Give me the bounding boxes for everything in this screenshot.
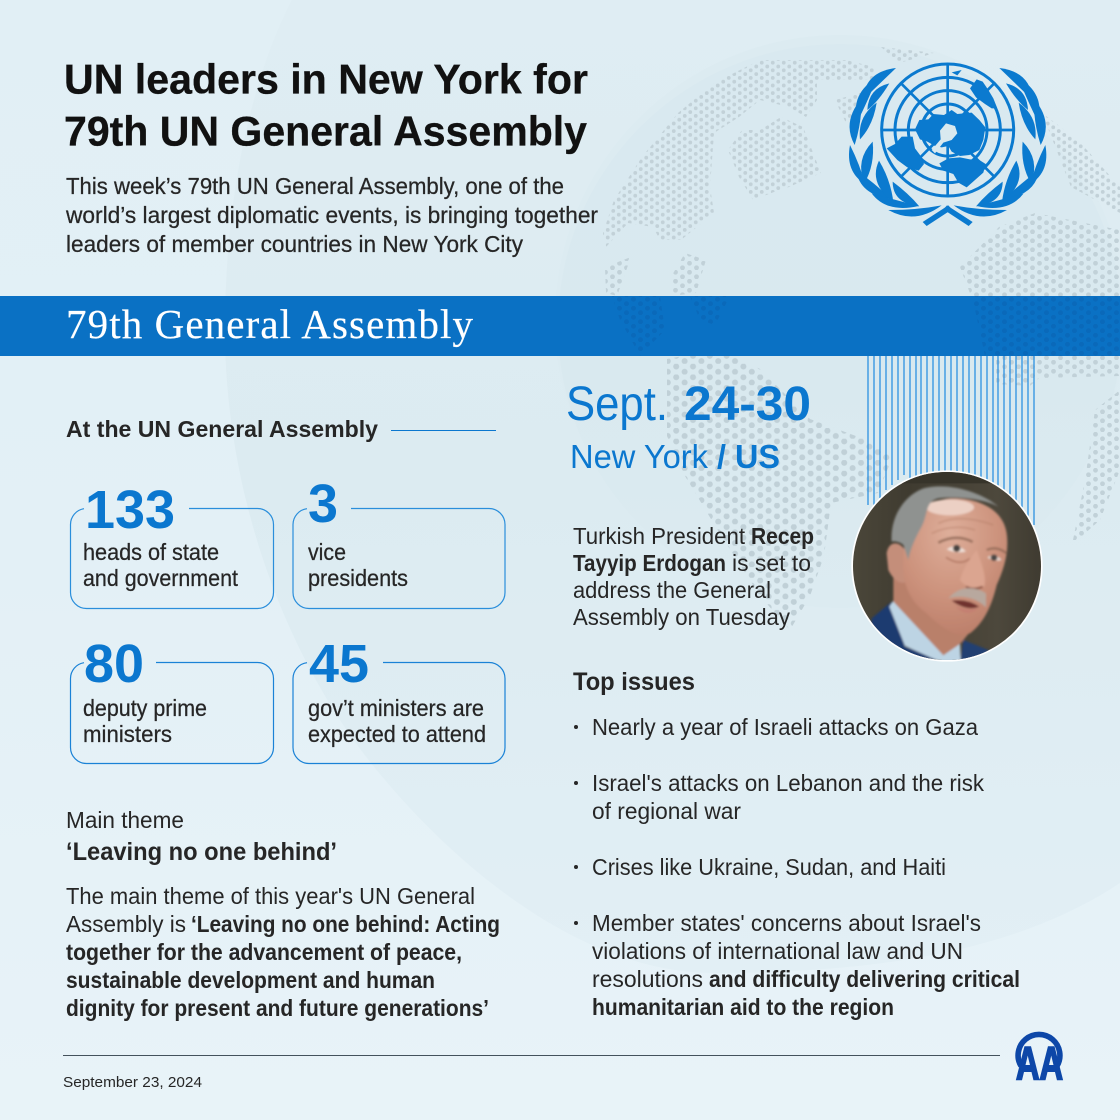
stat card: 45 gov't ministers: gov’t ministers are (308, 695, 484, 721)
date heading: Sept. (566, 378, 668, 431)
main theme heading: ‘Leaving no one behind’ (66, 838, 337, 866)
issue: Gaza: Nearly a year of Israeli attacks on Gaza (592, 714, 978, 740)
location heading: / US (717, 438, 780, 475)
main theme paragraph: Assembly is (66, 911, 186, 937)
date heading (566, 378, 811, 431)
issue: crises: Crises like Ukraine, Sudan, and Haiti (592, 854, 946, 880)
location heading (570, 438, 780, 475)
main theme paragraph: The main theme of this year's UN General (66, 883, 475, 909)
president text block (573, 523, 814, 630)
stat card: 80 deputy prime ministers: 80 (84, 634, 144, 694)
stat card: 3 vice presidents: presidents (308, 565, 408, 591)
icon: AA logo (1016, 1034, 1063, 1089)
issue: member states: and difficulty delivering critical (709, 966, 1020, 992)
stat card: 80 deputy prime ministers: deputy prime (83, 695, 207, 721)
stat card: 80 deputy prime ministers: ministers (83, 721, 172, 747)
president text block: Recep (751, 523, 814, 549)
president text block: address the General (573, 577, 771, 603)
subtitle text block (65, 173, 598, 257)
issue: member states: violations of international law and UN (592, 938, 963, 964)
stat card: 133 heads of state and government (70, 480, 274, 608)
title: 79th UN General Assembly (64, 108, 588, 154)
stat card: 3 vice presidents: vice (308, 539, 346, 565)
main theme paragraph: together for the advancement of peace, (66, 939, 462, 965)
icon: UN emblem (849, 64, 1046, 226)
issue: member states: resolutions (592, 966, 703, 992)
issue: member states (574, 910, 1020, 1020)
subtitle text block: world’s largest diplomatic events, is bringing together (65, 202, 598, 228)
vertical lines decoration (868, 356, 1034, 525)
stat card: 80 deputy prime ministers (70, 634, 274, 764)
band heading: 79th General Assembly (66, 301, 474, 347)
stat card: 45 gov't ministers: expected to attend (308, 721, 486, 747)
president text block: is set to (732, 550, 811, 576)
president text block: Assembly on Tuesday (573, 604, 790, 630)
subtitle text block: leaders of member countries in New York City (66, 231, 523, 257)
main theme paragraph: ‘Leaving no one behind: Acting (191, 911, 500, 937)
date: September 23, 2024 (63, 1074, 202, 1091)
title: UN leaders in New York for (64, 56, 588, 102)
issue: Lebanon: of regional war (592, 798, 741, 824)
main theme paragraph: dignity for present and future generations’ (66, 995, 489, 1021)
subtitle text block: This week’s 79th UN General Assembly, one of the (66, 173, 564, 199)
stat card: 45 gov't ministers (293, 634, 505, 764)
section band (0, 296, 1120, 356)
location heading: New York (570, 438, 708, 475)
globe dotted landmasses (603, 47, 1120, 630)
president text block: Turkish President (573, 523, 746, 549)
globe disk (555, 35, 1120, 608)
main theme paragraph (66, 883, 500, 1021)
footer rule (63, 1054, 1000, 1056)
main theme heading (66, 807, 337, 866)
icon: AA logo: AA (1016, 1037, 1063, 1089)
main theme heading: Main theme (66, 807, 184, 833)
stat card: 3 vice presidents (293, 474, 505, 608)
top issues heading: Top issues (573, 668, 695, 696)
stat card: 45 gov't ministers: 45 (309, 634, 369, 694)
issue: member states: Member states' concerns about Israel's (592, 910, 981, 936)
arctic gap (932, 123, 957, 153)
stat card: 133 heads of state and government: 133 (85, 480, 175, 540)
stat card: 3 vice presidents: 3 (308, 474, 338, 534)
issue: Lebanon (574, 770, 984, 824)
stat card: 133 heads of state and government: and government (83, 565, 239, 591)
main theme paragraph: sustainable development and human (66, 967, 435, 993)
stat card: 133 heads of state and government: heads of state (83, 539, 219, 565)
large background circle (225, 0, 1120, 973)
title (64, 56, 588, 154)
portrait photo (850, 470, 1047, 663)
issue: member states: humanitarian aid to the region (592, 994, 894, 1020)
president text block: Tayyip Erdogan (573, 550, 726, 576)
heading: At the UN General Assembly: At the UN General Assembly (66, 416, 378, 442)
issue: Lebanon: Israel's attacks on Lebanon and the risk (592, 770, 984, 796)
date heading: 24-30 (684, 378, 811, 431)
